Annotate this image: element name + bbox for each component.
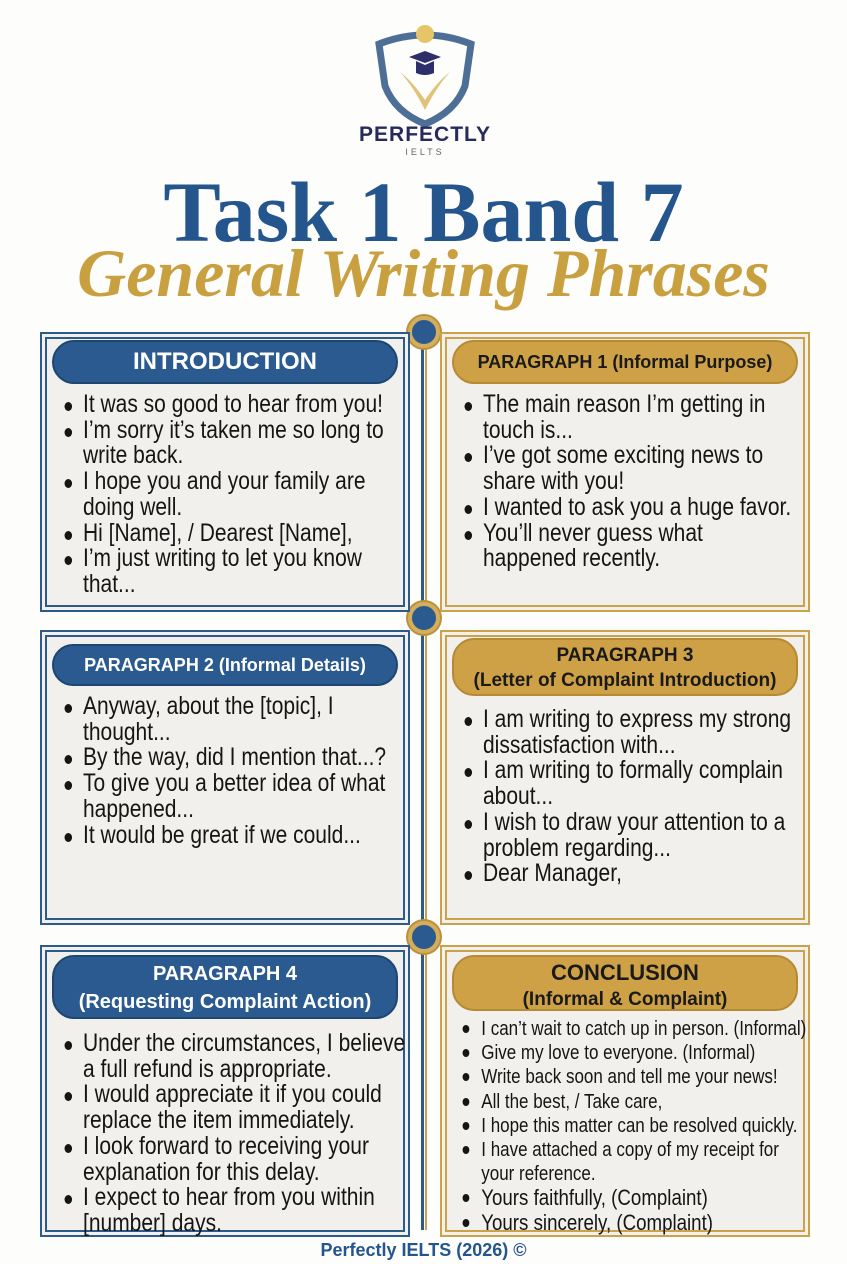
heading <box>52 644 398 686</box>
list: touch is... <box>483 416 573 444</box>
list: happened... <box>83 795 194 823</box>
list: Yours sincerely, (Complaint) <box>481 1210 713 1235</box>
list: I wish to draw your attention to a <box>483 808 785 836</box>
list: I can’t wait to catch up in person. (Informal) <box>481 1018 806 1040</box>
list: Yours faithfully, (Complaint) <box>481 1185 708 1210</box>
list: I’ve got some exciting news to <box>483 441 763 469</box>
list <box>64 1029 405 1237</box>
list: I hope you and your family are <box>83 467 366 495</box>
ribbon icon 3 <box>406 919 442 955</box>
list: [number] days. <box>83 1209 222 1237</box>
list: I am writing to formally complain <box>483 756 783 784</box>
list: Write back soon and tell me your news! <box>481 1066 778 1088</box>
heading: PARAGRAPH 1 (Informal Purpose) <box>478 352 772 372</box>
list: I expect to hear from you within <box>83 1183 375 1211</box>
center divider line <box>421 330 424 1230</box>
panel: paragraph 1 <box>440 332 810 612</box>
list: I have attached a copy of my receipt for <box>481 1139 779 1161</box>
logo <box>359 25 491 157</box>
list <box>64 390 384 598</box>
ribbon icon 2 <box>406 600 442 636</box>
heading: (Informal & Complaint) <box>523 989 727 1010</box>
heading <box>52 955 398 1019</box>
list: Give my love to everyone. (Informal) <box>481 1042 755 1064</box>
list: dissatisfaction with... <box>483 731 676 759</box>
list: explanation for this delay. <box>83 1158 320 1186</box>
panel: introduction <box>40 332 410 612</box>
heading: PARAGRAPH 4 <box>153 963 297 985</box>
panel: paragraph 4 <box>40 945 410 1237</box>
list: You’ll never guess what <box>483 519 703 547</box>
list: share with you! <box>483 467 624 495</box>
list: It would be great if we could... <box>83 821 361 849</box>
list: Under the circumstances, I believe <box>83 1029 405 1057</box>
list <box>464 390 791 572</box>
heading <box>452 340 798 384</box>
heading: INTRODUCTION <box>133 348 317 375</box>
title: Task 1 Band 7 <box>163 164 684 260</box>
list: To give you a better idea of what <box>83 769 385 797</box>
panel: conclusion <box>440 945 810 1237</box>
list: I would appreciate it if you could <box>83 1080 382 1108</box>
list <box>464 705 791 887</box>
list: I am writing to express my strong <box>483 705 791 733</box>
list: Dear Manager, <box>483 859 622 887</box>
list: replace the item immediately. <box>83 1106 355 1134</box>
list: I look forward to receiving your <box>83 1132 369 1160</box>
list: Anyway, about the [topic], I <box>83 692 334 720</box>
heading: CONCLUSION <box>551 960 699 985</box>
list: your reference. <box>481 1163 596 1185</box>
list: a full refund is appropriate. <box>83 1055 332 1083</box>
list: that... <box>83 570 136 598</box>
list: All the best, / Take care, <box>481 1091 662 1113</box>
heading: (Requesting Complaint Action) <box>79 991 371 1013</box>
list: about... <box>483 782 553 810</box>
list: The main reason I’m getting in <box>483 390 765 418</box>
list: happened recently. <box>483 544 660 572</box>
panel: paragraph 3 <box>440 630 810 925</box>
list: It was so good to hear from you! <box>83 390 383 418</box>
list <box>64 692 386 849</box>
logo: IELTS <box>405 147 445 157</box>
list: doing well. <box>83 493 182 521</box>
list <box>462 1018 806 1235</box>
heading: (Letter of Complaint Introduction) <box>474 670 776 691</box>
heading: PARAGRAPH 3 <box>557 645 693 666</box>
list: I hope this matter can be resolved quickly. <box>481 1115 797 1137</box>
list: problem regarding... <box>483 834 671 862</box>
heading <box>52 340 398 384</box>
heading <box>452 638 798 696</box>
list: By the way, did I mention that...? <box>83 743 386 771</box>
list: I’m just writing to let you know <box>83 544 362 572</box>
panel: paragraph 2 <box>40 630 410 925</box>
list: Hi [Name], / Dearest [Name], <box>83 519 353 547</box>
ribbon icon 1 <box>406 314 442 350</box>
heading: PARAGRAPH 2 (Informal Details) <box>84 655 366 675</box>
list: I’m sorry it’s taken me so long to <box>83 416 384 444</box>
heading <box>452 955 798 1011</box>
logo: PERFECTLY <box>359 123 491 146</box>
list: thought... <box>83 718 171 746</box>
subtitle: General Writing Phrases <box>77 235 770 311</box>
list: I wanted to ask you a huge favor. <box>483 493 791 521</box>
list: write back. <box>83 441 183 469</box>
footer: Perfectly IELTS (2026) © <box>320 1240 526 1260</box>
